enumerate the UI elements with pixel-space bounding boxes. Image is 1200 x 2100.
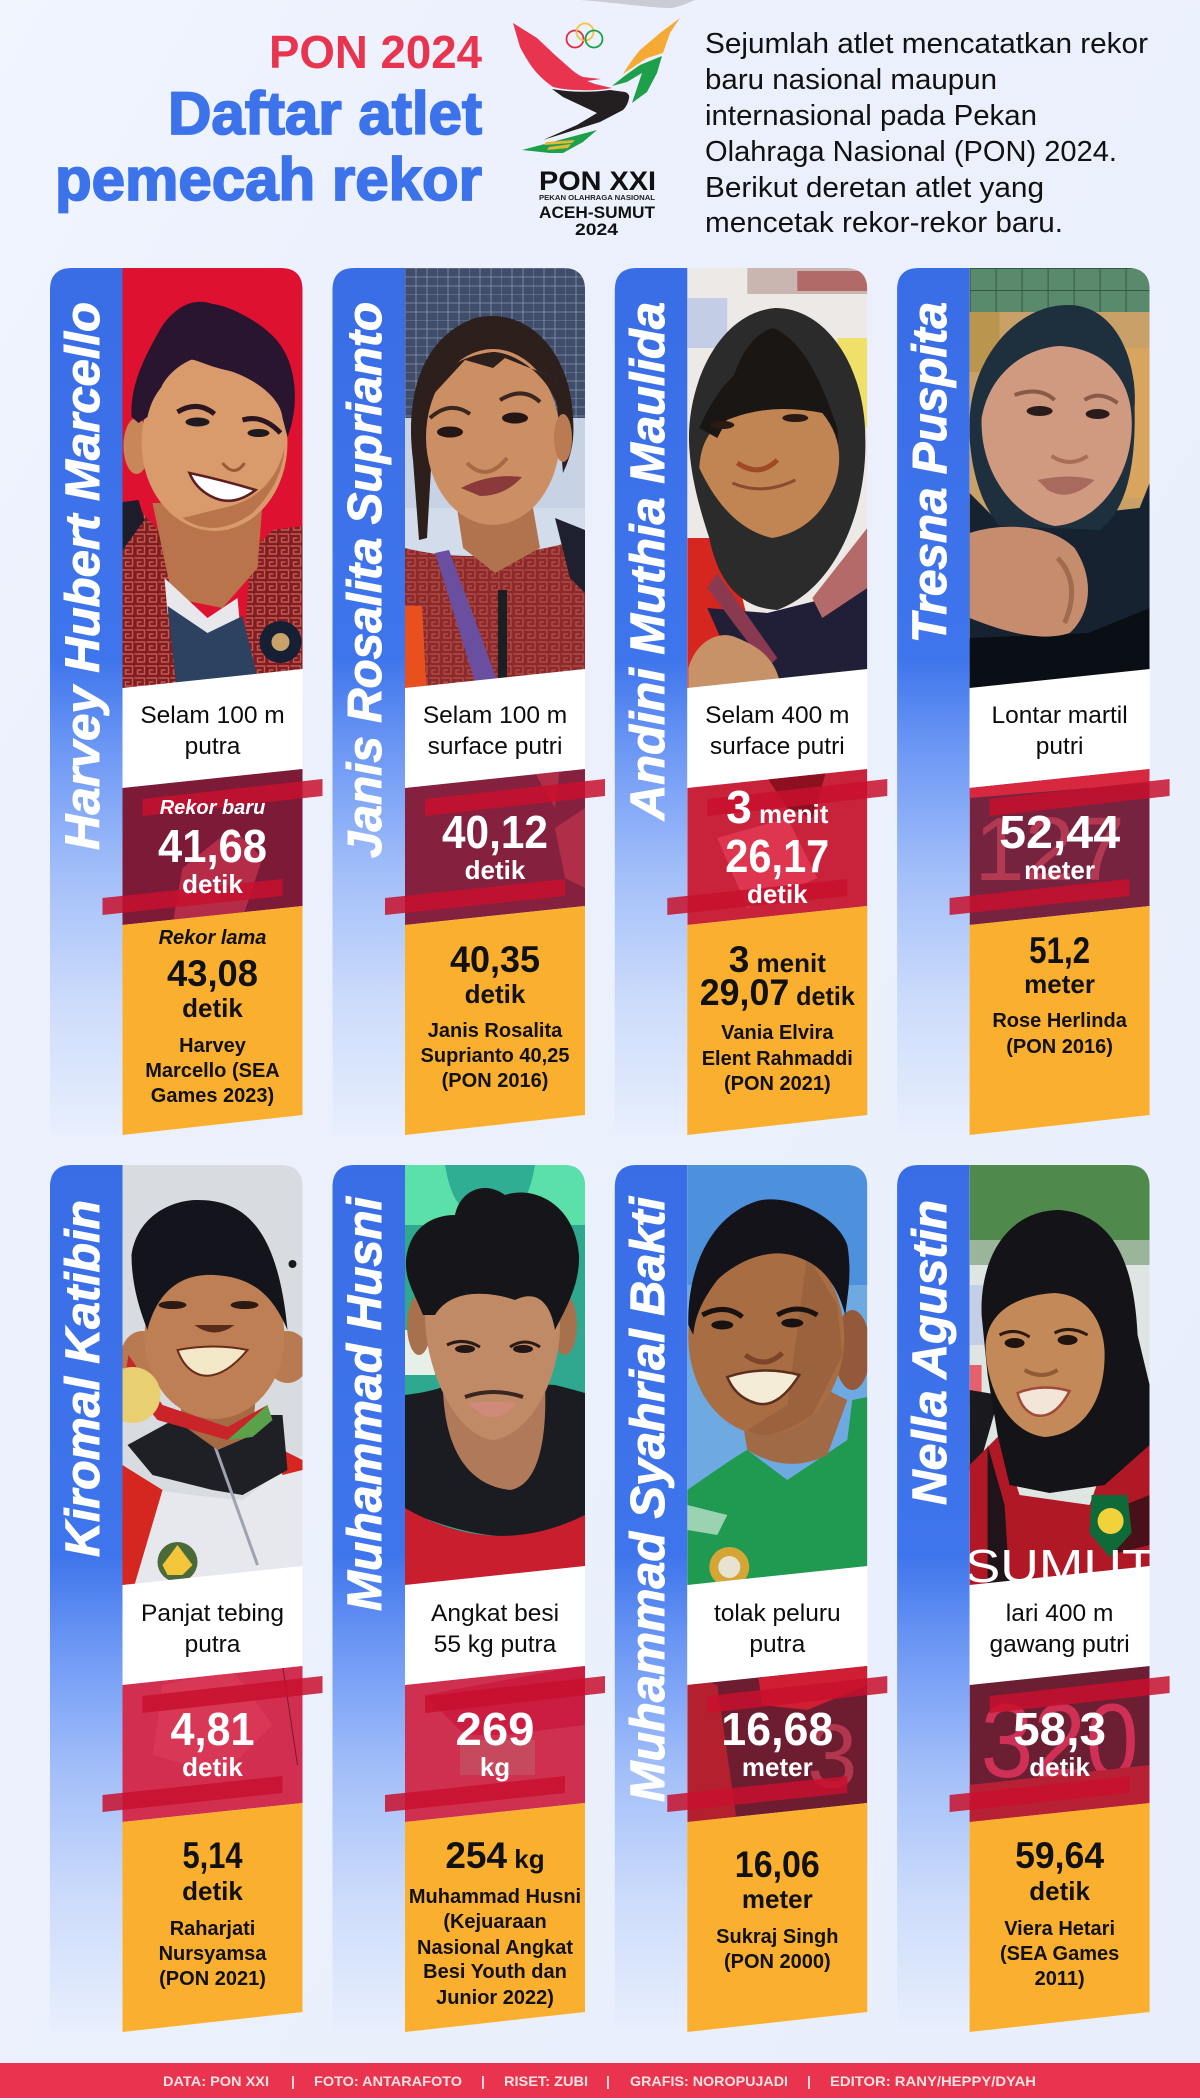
new record panel [405,1665,585,1825]
heading: PON 2024: PON 2024 [269,26,482,78]
new record value: 52,44 [999,806,1121,858]
card: Tresna Puspita [897,268,1170,1135]
new record value: detik [1029,1752,1090,1782]
intro text: internasional pada Pekan [705,100,1037,132]
old record value: Janis Rosalita [428,1020,563,1042]
old record value: Suprianto 40,25 [421,1045,569,1067]
event label [405,669,585,788]
new record value: detik [465,855,526,885]
new record value: meter [1024,855,1095,885]
old record value [159,1835,267,1990]
old record value: (SEA Games [1000,1943,1119,1965]
new record value [999,806,1121,885]
footer credits bar: GRAFIS: NOROPUJADI [630,2073,788,2089]
athlete name: Kiromal Katibin [57,1200,110,1557]
event label [405,1566,585,1685]
new record panel: 320 [981,1683,1139,1800]
old record value: 43,08 [167,953,258,994]
intro text: Olahraga Nasional (PON) 2024. [705,136,1117,168]
old record value: detik [1029,1876,1090,1906]
old record value: Rekor lama [159,927,266,949]
photo: Andini [687,268,867,698]
new record value: 40,12 [442,806,548,858]
old record value: Muhammad Husni [409,1886,581,1908]
event text: Selam 100 m [140,702,285,729]
event label [970,669,1150,788]
strike bars [102,1676,322,1812]
event label [687,1566,867,1685]
old record value: 40,35 [450,939,540,980]
new record panel: 3 [807,1707,857,1807]
new record value [170,1703,254,1782]
event label [122,1566,302,1685]
old record value: Vania Elvira [721,1022,834,1044]
event text: tolak peluru [714,1600,841,1627]
photo: Syahrial [687,1165,870,1595]
footer credits bar: | [807,2073,811,2089]
intro text [705,28,1148,239]
strike bars [385,779,605,915]
photo: Janis [405,268,585,698]
new record panel: 127 [975,800,1125,900]
old record value: detik [465,979,526,1009]
athlete name: Harvey Hubert Marcello [57,302,110,850]
new record panel [122,1665,302,1825]
heading: Daftar atlet pemecah rekor: Daftar atlet [168,80,482,147]
event text: putra [749,1631,806,1658]
old record panel [687,906,867,1135]
event text: gawang putri [989,1631,1130,1658]
new record value: detik [747,879,808,909]
footer credits bar: | [481,2073,485,2089]
strike bars [102,779,322,915]
old record value [421,939,569,1092]
old record panel [122,906,302,1135]
old record value: 51,2 [1029,930,1090,971]
card: Nella Agustin [897,1165,1170,2032]
new record value: meter [742,1752,813,1782]
photo: Kiromal [122,1165,302,1585]
event text: surface putri [710,733,845,760]
old record value: (Kejuaraan [443,1911,547,1933]
old record value: 2011) [1035,1968,1085,1990]
card: Andini Muthia Maulida [615,268,887,1135]
logo: PON XXI: 2024 [575,220,619,239]
footer credits bar: FOTO: ANTARAFOTO [314,2073,462,2089]
event text [431,1600,559,1658]
heading: Daftar atlet pemecah rekor [55,80,482,213]
new record panel [970,758,1150,928]
intro text: mencetak rekor-rekor baru. [705,207,1063,239]
athlete name: Janis Rosalita Suprianto [339,302,392,858]
event label [687,669,867,788]
new record value [158,797,267,899]
old record value: Besi Youth dan [423,1961,567,1983]
new record value: 26,17 [725,830,829,882]
old record value [1000,1835,1119,1990]
event label [122,669,302,788]
photo: Harvey [122,268,302,698]
event text: putri [1036,733,1083,760]
new record value [442,806,548,885]
card: Muhammad Husni [332,1165,605,2032]
athlete name: Tresna Puspita [904,302,957,643]
old record panel [405,1803,585,2032]
strike bars [667,1676,887,1812]
strike bars [385,1676,605,1812]
old record panel [970,906,1150,1135]
old record panel [405,906,585,1135]
new record panel [405,768,585,928]
new record panel [687,1660,867,1825]
new record value [721,1703,833,1782]
old record value: (PON 2021) [724,1073,831,1095]
athlete name: Nella Agustin [904,1200,957,1505]
old record value: 3 menit [729,939,826,980]
card: Janis Rosalita Suprianto [332,268,605,1135]
new record value: kg [480,1752,510,1782]
photo: Tresna [969,268,1150,698]
old record value: (PON 2016) [1006,1036,1113,1058]
footer credits bar: EDITOR: RANY/HEPPY/DYAH [830,2073,1036,2089]
old record value: 29,07 detik [700,972,855,1013]
old record value: 254 kg [445,1835,545,1876]
old record value: (PON 2021) [159,1968,266,1990]
logo: PON XXI: PON XXI [539,166,656,196]
athlete name: Muhammad Syahrial Bakti [622,1195,675,1802]
photo: Nella: SUMUT [965,1540,1155,1592]
event text: Panjat tebing [141,1600,284,1627]
event text: 55 kg putra [434,1631,557,1658]
new record panel [970,1665,1150,1825]
logo: PON XXI: PEKAN OLAHRAGA NASIONAL [539,193,655,202]
old record value [716,1844,838,1973]
old record value: Raharjati [170,1918,255,1940]
new record value: detik [182,1752,243,1782]
top decorative arc [580,0,695,8]
event text: lari 400 m [1006,1600,1113,1627]
athlete name: Muhammad Husni [339,1195,392,1611]
event text [714,1600,841,1658]
heading: Daftar atlet pemecah rekor: pemecah rekor [55,146,482,213]
event text: Lontar martil [992,702,1128,729]
new record value [725,781,829,909]
old record value: 59,64 [1015,1835,1105,1876]
old record value: (PON 2016) [442,1070,548,1092]
card: Harvey Hubert Marcello [50,268,322,1135]
old record value [145,927,280,1107]
new record value: Rekor baru [160,797,265,819]
old record value [700,939,855,1095]
card: Kiromal Katibin [50,1165,322,2032]
new record value: 58,3 [1013,1703,1106,1755]
old record panel [122,1803,302,2032]
old record panel [687,1803,867,2032]
old record panel [970,1803,1150,2032]
logo: PON XXI [513,18,680,239]
footer credits bar [0,2063,1200,2098]
new record panel [687,768,867,928]
event text [989,1600,1130,1658]
new record value: 41,68 [158,820,267,872]
strike bars [667,779,887,915]
event text [141,1600,284,1658]
old record value: Nasional Angkat [417,1937,573,1959]
old record value: Sukraj Singh [716,1926,838,1948]
event text: Selam 100 m [423,702,567,729]
footer credits bar: RISET: ZUBI [504,2073,588,2089]
event label [970,1566,1150,1685]
new record value: 16,68 [721,1703,833,1755]
old record value: Rose Herlinda [992,1010,1128,1032]
event text [992,702,1128,760]
photo: Husni [405,1165,585,1595]
old record value: detik [182,993,243,1023]
old record value: meter [1024,969,1095,999]
event text: surface putri [428,733,562,760]
logo: PON XXI: ACEH-SUMUT [539,203,656,222]
card: Muhammad Syahrial Bakti [615,1165,887,2032]
new record value: detik [182,869,243,899]
event text [423,702,567,760]
old record value: Elent Rahmaddi [702,1048,853,1070]
old record value: meter [742,1884,813,1914]
intro text: Sejumlah atlet mencatatkan rekor [705,28,1148,60]
photo: Nella [965,1165,1155,1595]
event text: putra [185,1631,241,1658]
old record value: 5,14 [182,1835,243,1876]
new record value [1013,1703,1106,1782]
old record value [992,930,1128,1058]
old record value: detik [182,1876,243,1906]
new record panel [122,768,302,928]
event text [705,702,849,760]
old record value: Marcello (SEA [145,1060,280,1082]
new record value [456,1703,534,1782]
intro text: Berikut deretan atlet yang [705,172,1044,204]
old record value [409,1835,581,2009]
event text [140,702,285,760]
footer credits bar: | [291,2073,295,2089]
event text: putra [185,733,241,760]
new record value: 269 [456,1703,534,1755]
athlete name: Andini Muthia Maulida [622,302,675,821]
old record value: Junior 2022) [436,1987,554,2009]
old record value: Nursyamsa [159,1943,267,1965]
footer credits bar: | [606,2073,610,2089]
old record value: Harvey [179,1035,247,1057]
event text: Angkat besi [431,1600,559,1627]
strike bars [950,779,1170,915]
old record value: Viera Hetari [1004,1918,1115,1940]
footer credits bar: DATA: PON XXI [163,2073,269,2089]
old record value: (PON 2000) [724,1951,831,1973]
event text: Selam 400 m [705,702,849,729]
old record value: 16,06 [735,1844,820,1885]
new record value: 3 menit [726,781,829,833]
new record value: 4,81 [170,1703,254,1755]
old record value: Games 2023) [151,1085,274,1107]
intro text: baru nasional maupun [705,64,997,96]
strike bars [950,1676,1170,1812]
